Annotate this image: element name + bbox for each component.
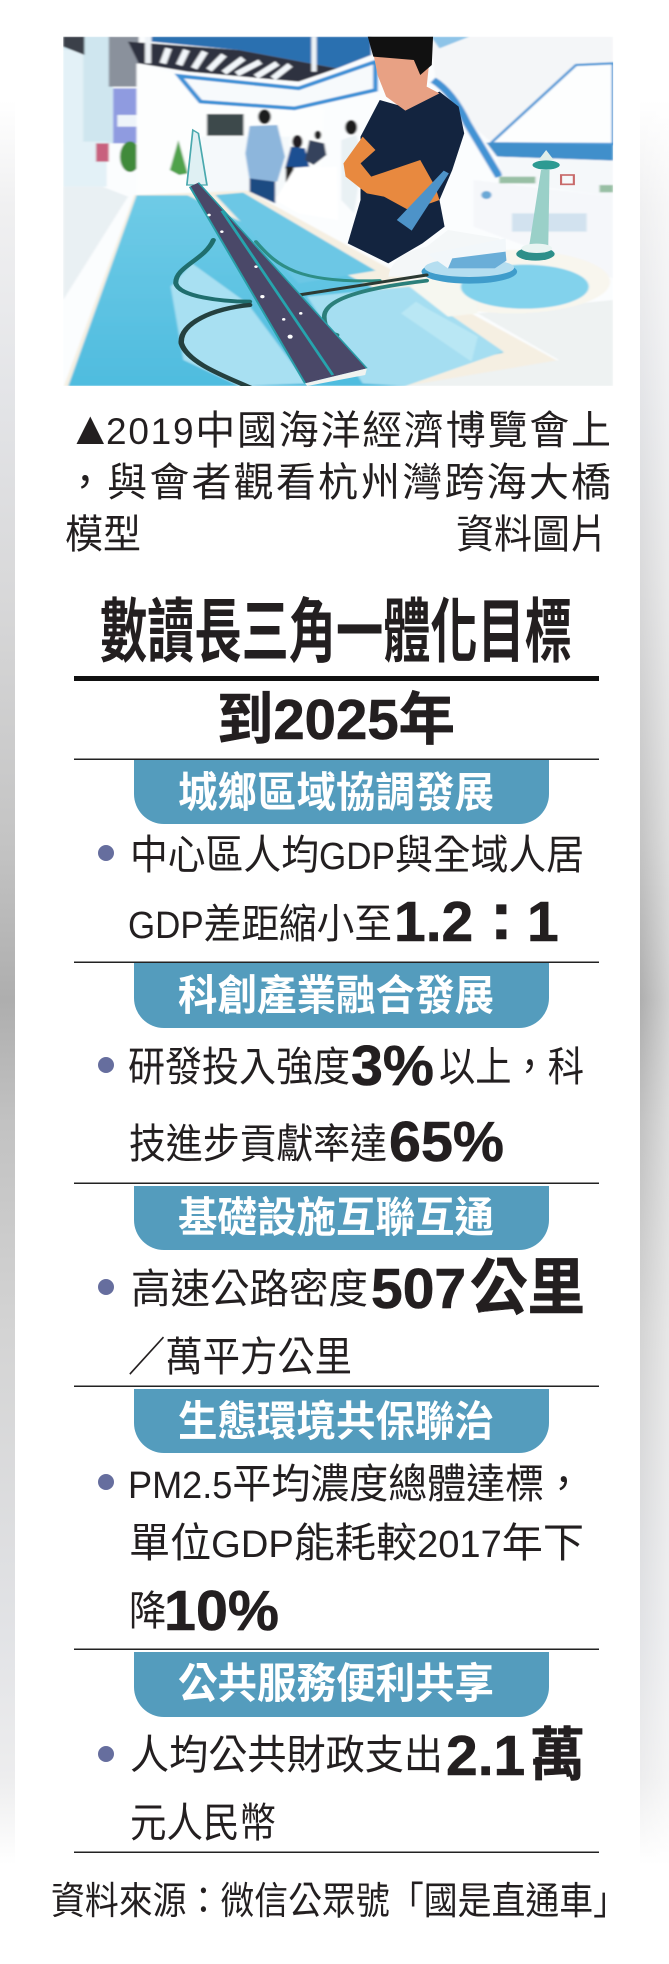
section tab	[134, 1652, 549, 1717]
body text: 研發投入強度	[128, 1044, 350, 1090]
section tab	[134, 963, 549, 1028]
body text: 高速公路密度	[131, 1266, 368, 1312]
body text: 降	[129, 1588, 166, 1634]
section tab	[134, 760, 549, 824]
body text: 1.2	[394, 890, 473, 954]
section tab	[134, 1389, 549, 1453]
section: sci-tech innovation	[74, 962, 599, 1174]
body text: ／萬平方公里	[128, 1334, 352, 1380]
bullet	[98, 845, 114, 861]
subtitle: 到2025年	[217, 688, 455, 752]
tab heading: 公共服務便利共享	[178, 1650, 494, 1711]
body text	[128, 1461, 584, 1643]
bullet	[98, 1474, 114, 1490]
body text: 65%	[389, 1110, 504, 1174]
body text: 單位GDP能耗較2017年下	[129, 1520, 584, 1566]
body text: 507	[371, 1257, 466, 1321]
photo caption: 模型	[65, 513, 141, 557]
photo: visitor viewing Hangzhou Bay bridge model	[63, 36, 614, 386]
body text: 萬	[530, 1723, 585, 1788]
body text: 10%	[164, 1579, 279, 1643]
body text: 公里	[470, 1254, 585, 1323]
bottom rule	[74, 1852, 599, 1853]
body text	[128, 1034, 584, 1174]
man	[348, 92, 464, 263]
section: ecology	[74, 1386, 599, 1643]
body text	[130, 1723, 585, 1846]
body text	[128, 832, 584, 954]
photo caption: 2019中國海洋經濟博覽會上	[106, 409, 611, 453]
title rule	[74, 676, 599, 681]
body text: 元人民幣	[130, 1800, 276, 1846]
body text: PM2.5平均濃度總體達標，	[128, 1461, 583, 1507]
body text	[128, 1254, 585, 1380]
tab heading: 城鄉區域協調發展	[178, 759, 494, 820]
section: urban-rural coordination	[74, 758, 599, 954]
body text: 中心區人均GDP與全域人居	[130, 832, 584, 878]
bullet	[98, 1279, 114, 1295]
left grey side band	[0, 100, 15, 1865]
bullet	[98, 1057, 114, 1073]
section tab	[134, 1186, 549, 1250]
bullet	[98, 1746, 114, 1762]
section: public services	[74, 1648, 599, 1846]
photo caption	[65, 401, 611, 557]
body text: 1	[527, 890, 559, 954]
tab heading: 科創產業融合發展	[178, 962, 494, 1023]
photo caption: ▲	[67, 401, 114, 454]
tab heading: 生態環境共保聯治	[178, 1388, 494, 1449]
body text: GDP差距縮小至	[128, 901, 392, 947]
photo caption: ，與會者觀看杭州灣跨海大橋	[65, 461, 611, 505]
body text: 技進步貢獻率達	[129, 1121, 387, 1167]
body text: 3%	[351, 1034, 434, 1098]
right grey side band	[640, 100, 669, 1865]
body text: 以上，科	[439, 1044, 584, 1090]
photo caption: 資料圖片	[456, 513, 608, 557]
tab heading: 基礎設施互聯互通	[178, 1184, 494, 1245]
body text: :	[490, 878, 513, 954]
body text: 人均公共財政支出	[130, 1732, 443, 1778]
body text: 2.1	[446, 1724, 525, 1788]
section: infrastructure	[74, 1182, 599, 1380]
